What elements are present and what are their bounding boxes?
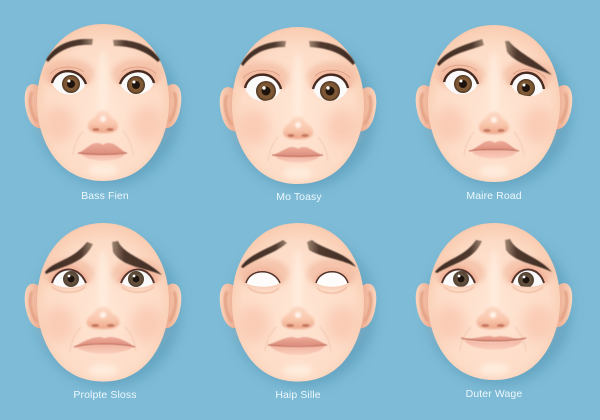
mouth: [469, 141, 519, 159]
eyes: [243, 70, 350, 101]
mouth: [78, 143, 127, 161]
label: Bass Fien: [81, 190, 129, 202]
face: strained smile, Duter Wage: [416, 223, 572, 400]
head: [416, 25, 572, 187]
mouth: [74, 337, 135, 354]
mouth: [461, 336, 526, 350]
head: [25, 223, 181, 387]
nose: [70, 306, 136, 351]
eyebrows: [437, 39, 552, 75]
eyes: [442, 65, 546, 97]
eyebrows: [435, 239, 552, 273]
nose: [464, 112, 524, 156]
face: sad, Prolpte Sloss: [25, 223, 181, 401]
head: [220, 223, 376, 387]
label: Haip Sille: [275, 389, 321, 401]
nose: [73, 110, 133, 155]
nose: [268, 116, 328, 161]
eyes: [52, 269, 154, 292]
head: [220, 27, 376, 189]
head: [416, 223, 572, 385]
eyebrows: [45, 241, 162, 275]
nose: [265, 306, 331, 351]
eyebrows: [241, 240, 356, 268]
face: wide eyes, Bass Fien: [25, 24, 181, 202]
label: Maire Road: [466, 190, 522, 202]
mouth: [268, 337, 327, 355]
eyebrows: [241, 41, 355, 66]
label: Prolpte Sloss: [73, 389, 137, 401]
face: eyes rolled up, Haip Sille: [220, 223, 376, 401]
eyes: [50, 67, 156, 94]
label: Mo Toasy: [276, 191, 322, 203]
label: Duter Wage: [466, 388, 522, 400]
eyebrows: [46, 39, 160, 62]
eyes: [442, 269, 544, 292]
mouth: [272, 147, 323, 163]
eyes: [246, 271, 348, 293]
face: worried, Maire Road: [416, 25, 572, 202]
head: [25, 24, 181, 186]
face: wide eyes, Mo Toasy: [220, 27, 376, 203]
nose: [460, 306, 526, 351]
